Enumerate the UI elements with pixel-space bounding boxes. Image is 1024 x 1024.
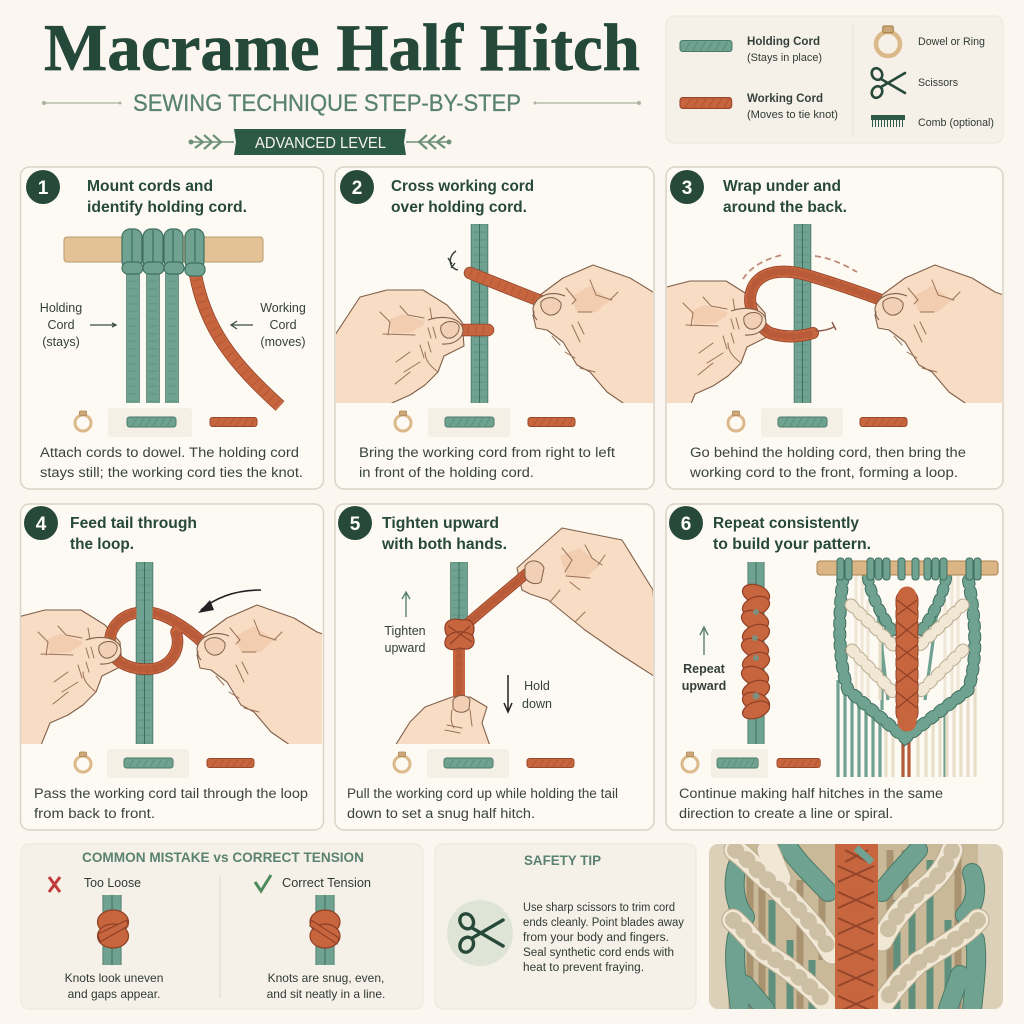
label: tighten upward: [384, 592, 426, 655]
step number 6: 6: [681, 514, 691, 535]
step 2 heading: [391, 178, 534, 216]
safety text: Use sharp scissors to trim cord: [523, 902, 675, 914]
step 6 heading: Repeat consistently: [713, 515, 859, 532]
illustration: dowel with mounted cords: [64, 229, 280, 406]
icon: working cord: [680, 98, 732, 108]
step 1 heading: identify holding cord.: [87, 199, 247, 216]
panel: step 2: [334, 166, 655, 490]
step 5 description: Pull the working cord up while holding the tail: [347, 786, 618, 801]
step number 2: [340, 170, 374, 204]
step 1 description: stays still; the working cord ties the knot.: [40, 465, 303, 480]
safety text: ends cleanly. Point blades away: [523, 917, 684, 929]
label: repeat upward: [682, 627, 726, 693]
icon: ring: [875, 26, 901, 57]
level badge: [188, 129, 452, 155]
icon: scissors: [870, 66, 905, 100]
step number 5: 5: [350, 514, 361, 535]
step 3 description: Go behind the holding cord, then bring the: [690, 445, 966, 460]
legend: cord labels: (Stays in place): [747, 52, 822, 64]
label: working cord: [231, 301, 306, 349]
step number 1: [26, 170, 60, 204]
step 6 description: direction to create a line or spiral.: [679, 806, 893, 821]
legend: cord labels: Working Cord: [747, 91, 823, 105]
icon: scissors in circle: [447, 900, 513, 966]
step number 4: 4: [36, 514, 47, 535]
subtitle with rules: SEWING TECHNIQUE STEP-BY-STEP: [133, 90, 521, 117]
safety text: [523, 902, 684, 974]
label: tighten upward: upward: [384, 641, 426, 655]
step 6 heading: [713, 515, 871, 553]
label: holding cord: Holding: [40, 301, 82, 315]
level badge: ADVANCED LEVEL: [255, 135, 386, 152]
label: holding cord: Cord: [47, 318, 75, 332]
label: repeat upward: upward: [682, 679, 726, 693]
step 4 heading: the loop.: [70, 536, 134, 553]
label: holding cord: [40, 301, 116, 349]
icon: cross: [49, 877, 60, 892]
panel: safety tip: [435, 844, 696, 1009]
caption: correct tension: and sit neatly in a line.: [267, 987, 385, 1001]
step 3 description: working cord to the front, forming a loop.: [689, 465, 958, 480]
illustration: knot chain: [739, 562, 772, 744]
step 5 description: [347, 786, 618, 821]
label: too loose: Too Loose: [84, 876, 141, 890]
caption: too loose: [65, 971, 163, 1001]
label: working cord: Cord: [269, 318, 297, 332]
step 4 heading: [70, 515, 197, 553]
label: hold down: down: [522, 697, 552, 711]
step 4 heading: Feed tail through: [70, 515, 197, 532]
legend: tool labels: Dowel or Ring: [918, 36, 985, 48]
label: working cord: (moves): [260, 335, 306, 349]
label: tighten upward: Tighten: [384, 624, 426, 638]
legend: cord labels: (Moves to tie knot): [747, 109, 838, 121]
panel heading: COMMON MISTAKE vs CORRECT TENSION: [82, 849, 364, 865]
icon: check: [255, 875, 271, 891]
step number 3: 3: [682, 178, 692, 199]
step number 4: [24, 506, 58, 540]
step 4 description: Pass the working cord tail through the loop: [34, 786, 308, 801]
step 4 description: from back to front.: [34, 806, 155, 821]
step 4 description: [34, 786, 308, 821]
step 3 heading: around the back.: [723, 199, 847, 216]
step 2 description: in front of the holding cord.: [359, 465, 534, 480]
step number 3: [670, 170, 704, 204]
panel: common mistake vs correct tension: [21, 844, 423, 1009]
step 6 description: [679, 786, 943, 821]
legend: tool labels: Scissors: [918, 77, 958, 89]
step 1 description: [40, 445, 303, 480]
safety text: from your body and fingers.: [523, 932, 669, 944]
step 6 heading: to build your pattern.: [713, 536, 871, 553]
label: hold down: Hold: [524, 679, 550, 693]
materials row: [394, 408, 575, 437]
legend: tool labels: [918, 36, 994, 129]
step 3 heading: Wrap under and: [723, 178, 841, 195]
illustration: snug knot: [310, 895, 340, 965]
photo: macrame close-up: [709, 840, 1003, 1012]
label: working cord: Working: [260, 301, 306, 315]
safety text: Seal synthetic cord ends with: [523, 947, 674, 959]
step 3 heading: [723, 178, 847, 216]
label: holding cord: (stays): [42, 335, 80, 349]
legend: tool labels: Comb (optional): [918, 117, 994, 129]
materials row: [74, 749, 254, 778]
panel: step 1: [20, 167, 324, 489]
materials row: [394, 749, 574, 778]
step number 6: [669, 506, 703, 540]
step number 2: 2: [352, 178, 362, 199]
step number 5: [338, 506, 372, 540]
step 6 description: Continue making half hitches in the same: [679, 786, 943, 801]
label: hold down: [504, 675, 552, 712]
step 1 heading: Mount cords and: [87, 178, 213, 195]
panel: step 3: [665, 166, 1004, 490]
panel: step 4: [20, 503, 324, 831]
step 5 heading: with both hands.: [381, 536, 507, 553]
caption: correct tension: [267, 971, 385, 1001]
icon: comb: [871, 115, 905, 127]
icon: holding cord: [680, 40, 732, 52]
safety text: heat to prevent fraying.: [523, 962, 644, 974]
label: repeat upward: Repeat: [683, 662, 726, 676]
legend: cord labels: [747, 34, 838, 121]
step 2 description: Bring the working cord from right to left: [359, 445, 615, 460]
legend: cord labels: Holding Cord: [747, 34, 820, 48]
panel: step 6: [666, 504, 1003, 830]
materials row: [74, 408, 257, 437]
materials row: [682, 749, 820, 778]
illustration: loose knot: [98, 895, 128, 965]
safety heading: SAFETY TIP: [524, 852, 601, 868]
step 1 description: Attach cords to dowel. The holding cord: [40, 445, 299, 460]
panel: step 5: [335, 504, 660, 830]
illustration: feed tail: [21, 562, 322, 744]
materials row: [728, 408, 907, 437]
caption: too loose: Knots look uneven: [65, 971, 163, 985]
step 5 description: down to set a snug half hitch.: [347, 806, 535, 821]
legend panel: [666, 16, 1003, 143]
step number 1: 1: [38, 178, 49, 199]
label: correct tension: Correct Tension: [282, 876, 371, 890]
caption: correct tension: Knots are snug, even,: [268, 971, 384, 985]
step 1 heading: [87, 178, 247, 216]
title: Macrame Half Hitch: [44, 11, 640, 85]
step 5 heading: Tighten upward: [382, 515, 499, 532]
caption: too loose: and gaps appear.: [68, 987, 160, 1001]
step 2 heading: Cross working cord: [391, 178, 534, 195]
step 5 heading: [381, 515, 507, 553]
illustration: finished wall hanging: [817, 558, 998, 777]
step 3 description: [689, 445, 966, 480]
step 2 description: [359, 445, 615, 480]
illustration: tighten: [395, 528, 660, 746]
illustration: wrap behind: [667, 224, 1002, 403]
illustration: cross over: [336, 224, 653, 403]
step 2 heading: over holding cord.: [391, 199, 527, 216]
